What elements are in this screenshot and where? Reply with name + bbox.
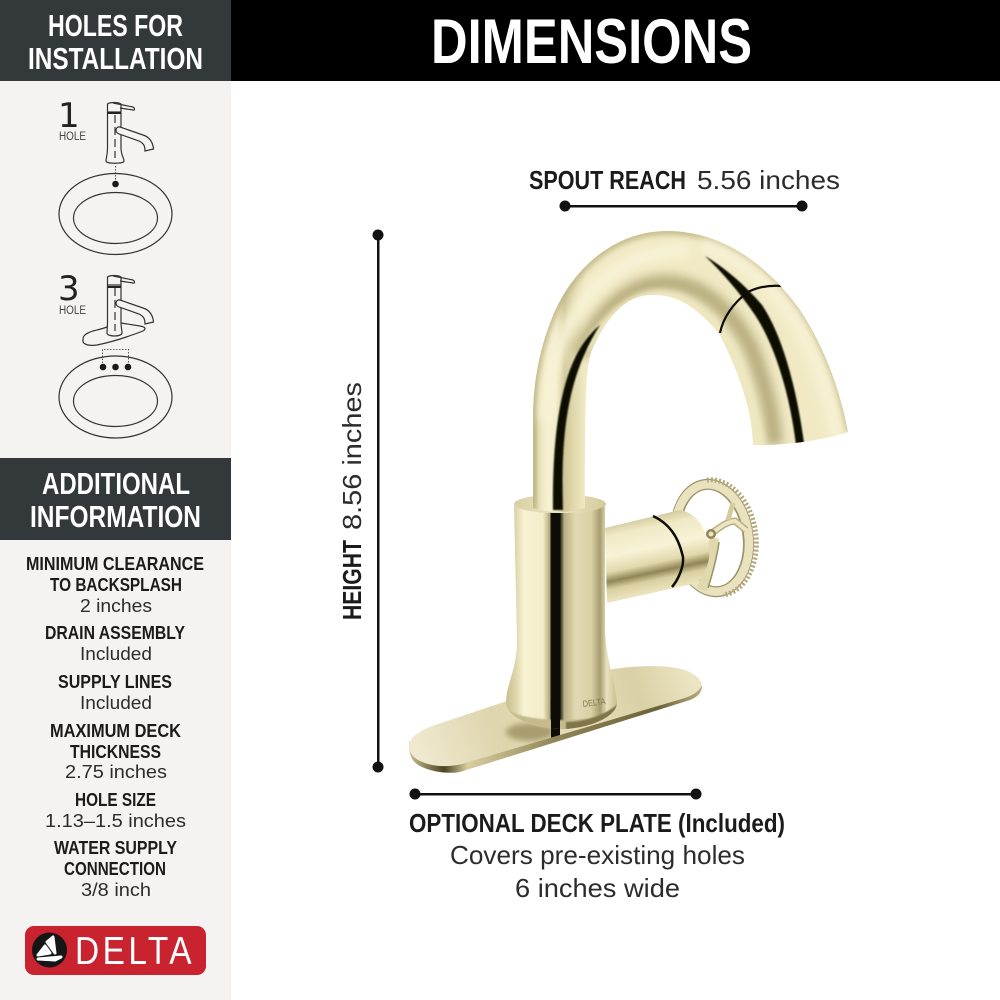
item: minimum clearance: 2 inches xyxy=(80,596,152,616)
dimension: height xyxy=(337,230,384,772)
icon: sink with three holes xyxy=(59,350,172,438)
item: drain assembly xyxy=(45,623,185,664)
item: maximum deck thickness: MAXIMUM DECK xyxy=(50,721,181,741)
logo: delta xyxy=(25,926,206,975)
item: drain assembly: Included xyxy=(80,644,152,664)
text: deck plate label: Covers pre-existing holes xyxy=(450,840,745,870)
title banner: dimensions xyxy=(231,0,1000,81)
item: minimum clearance: TO BACKSPLASH xyxy=(50,575,182,595)
text: deck plate label: OPTIONAL DECK PLATE (Included) xyxy=(409,808,785,838)
label: height xyxy=(337,382,367,620)
handle barrel xyxy=(605,510,709,603)
diagram: 3 hole installation xyxy=(58,269,172,438)
item: drain assembly: DRAIN ASSEMBLY xyxy=(45,623,185,643)
text: deck plate label xyxy=(409,808,785,903)
dimension: optional deck plate xyxy=(409,788,785,903)
item: water supply connection: 3/8 inch xyxy=(81,880,151,900)
item: supply lines: SUPPLY LINES xyxy=(58,672,172,692)
line: height measure xyxy=(372,230,384,772)
left sidebar panel xyxy=(0,0,231,1000)
line: deck plate measure xyxy=(410,788,702,800)
item: hole size: HOLE SIZE xyxy=(75,790,156,810)
item: minimum clearance: MINIMUM CLEARANCE xyxy=(26,554,204,574)
item: minimum clearance xyxy=(26,554,204,616)
label: 1 hole: HOLE xyxy=(59,131,86,143)
item: water supply connection: CONNECTION xyxy=(64,859,166,879)
heading: additional information: INFORMATION xyxy=(30,499,201,534)
icon: small faucet xyxy=(106,102,154,163)
spout xyxy=(533,231,848,512)
item: hole size xyxy=(45,790,186,831)
label: 3 hole: 3 xyxy=(58,269,80,309)
text block: additional information list xyxy=(26,554,204,900)
label: spout reach: 5.56 inches xyxy=(697,165,840,195)
handle wheel xyxy=(668,474,764,601)
heading: holes for installation xyxy=(0,0,231,81)
label: 1 hole xyxy=(58,96,86,143)
logo mark on faucet base: DELTA xyxy=(582,696,606,709)
text: deck plate label: 6 inches wide xyxy=(515,873,680,903)
item: water supply connection xyxy=(54,838,177,900)
item: supply lines xyxy=(58,672,172,713)
label: 3 hole: HOLE xyxy=(59,305,86,317)
label: height: 8.56 inches xyxy=(337,382,367,530)
item: water supply connection: WATER SUPPLY xyxy=(54,838,177,858)
icon: small faucet with deck plate xyxy=(83,276,154,345)
wheel ring xyxy=(668,474,764,601)
heading: additional information xyxy=(0,458,231,540)
deck plate xyxy=(409,666,702,773)
item: maximum deck thickness: 2.75 inches xyxy=(65,762,167,782)
line: spout reach measure xyxy=(560,200,808,212)
label: height: HEIGHT xyxy=(337,540,367,620)
item: supply lines: Included xyxy=(80,693,152,713)
label: spout reach: SPOUT REACH xyxy=(529,165,686,195)
heading: holes for installation: INSTALLATION xyxy=(28,41,203,76)
icon: sink with one hole xyxy=(59,166,172,254)
diagram: 1 hole installation xyxy=(58,96,172,254)
label: 3 hole xyxy=(58,269,86,317)
faucet body xyxy=(506,494,618,732)
heading: holes for installation: HOLES FOR xyxy=(48,8,183,43)
logo: delta: DELTA xyxy=(75,930,195,973)
dimension: spout reach xyxy=(529,165,840,212)
item: maximum deck thickness xyxy=(50,721,181,782)
title banner: dimensions: DIMENSIONS xyxy=(431,7,752,77)
item: hole size: 1.13–1.5 inches xyxy=(45,811,186,831)
label: 1 hole: 1 xyxy=(58,96,80,136)
item: maximum deck thickness: THICKNESS xyxy=(70,742,161,762)
wheel spokes and hub xyxy=(702,503,746,590)
heading: additional information: ADDITIONAL xyxy=(42,466,190,501)
label: spout reach xyxy=(529,165,840,195)
product: faucet xyxy=(409,231,848,773)
